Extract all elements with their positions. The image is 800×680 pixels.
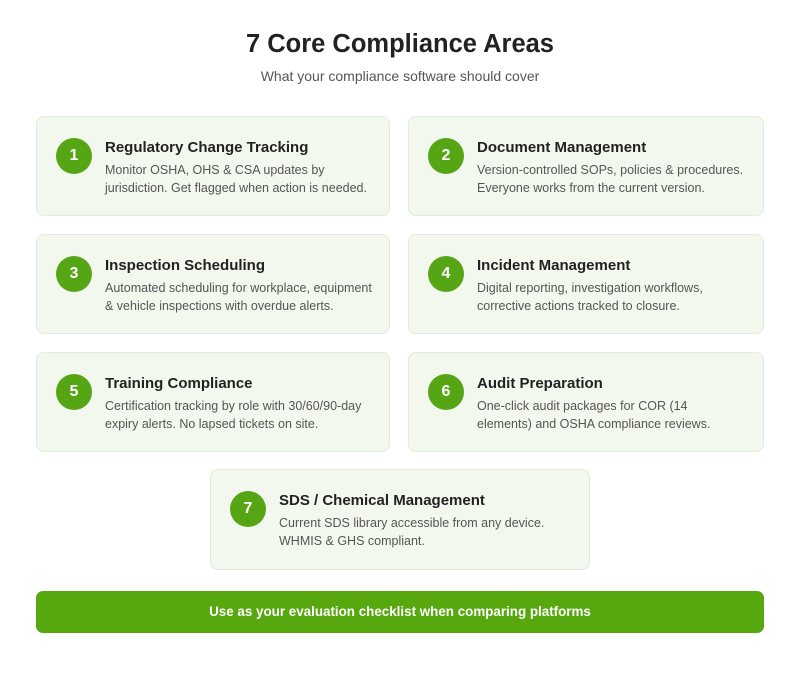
card 6: 6 — [442, 383, 450, 400]
card 1: Monitor OSHA, OHS & CSA updates by jurisdiction. Get flagged when action is needed. — [105, 163, 367, 194]
card 7: 7 — [244, 500, 252, 517]
card 5 — [36, 352, 390, 452]
card 2: 2 — [442, 147, 450, 164]
card 7: Current SDS library accessible from any device. WHMIS & GHS compliant. — [279, 516, 544, 548]
card 3: Automated scheduling for workplace, equipment & vehicle inspections with overdue alerts. — [105, 281, 372, 312]
card 7: SDS / Chemical Management — [279, 492, 485, 509]
card 2: Version-controlled SOPs, policies & procedures. Everyone works from the current version. — [477, 163, 743, 194]
card 1: Regulatory Change Tracking — [105, 139, 308, 156]
card 4: Digital reporting, investigation workflows, corrective actions tracked to closure. — [477, 281, 703, 312]
banner: Use as your evaluation checklist when comparing platforms — [209, 604, 591, 619]
card 2: Document Management — [477, 139, 646, 156]
card 3: Inspection Scheduling — [105, 257, 265, 274]
card 6 — [408, 352, 764, 452]
banner — [36, 591, 764, 633]
card 6: Audit Preparation — [477, 375, 603, 392]
card 4: 4 — [442, 265, 450, 282]
subtitle: What your compliance software should cover — [261, 68, 539, 84]
card 5: Training Compliance — [105, 375, 253, 392]
card 4: Incident Management — [477, 257, 630, 274]
title: 7 Core Compliance Areas — [246, 30, 554, 58]
card 4 — [408, 234, 764, 334]
card 5: Certification tracking by role with 30/60/90-day expiry alerts. No lapsed tickets on site. — [105, 399, 361, 430]
card 6: One-click audit packages for COR (14 elements) and OSHA compliance reviews. — [477, 399, 710, 430]
card 1: 1 — [70, 147, 78, 164]
card 5: 5 — [70, 383, 78, 400]
card 3 — [36, 234, 390, 334]
card 2 — [408, 116, 764, 216]
card 1 — [36, 116, 390, 216]
card 7 — [210, 469, 590, 570]
card 3: 3 — [70, 265, 78, 282]
